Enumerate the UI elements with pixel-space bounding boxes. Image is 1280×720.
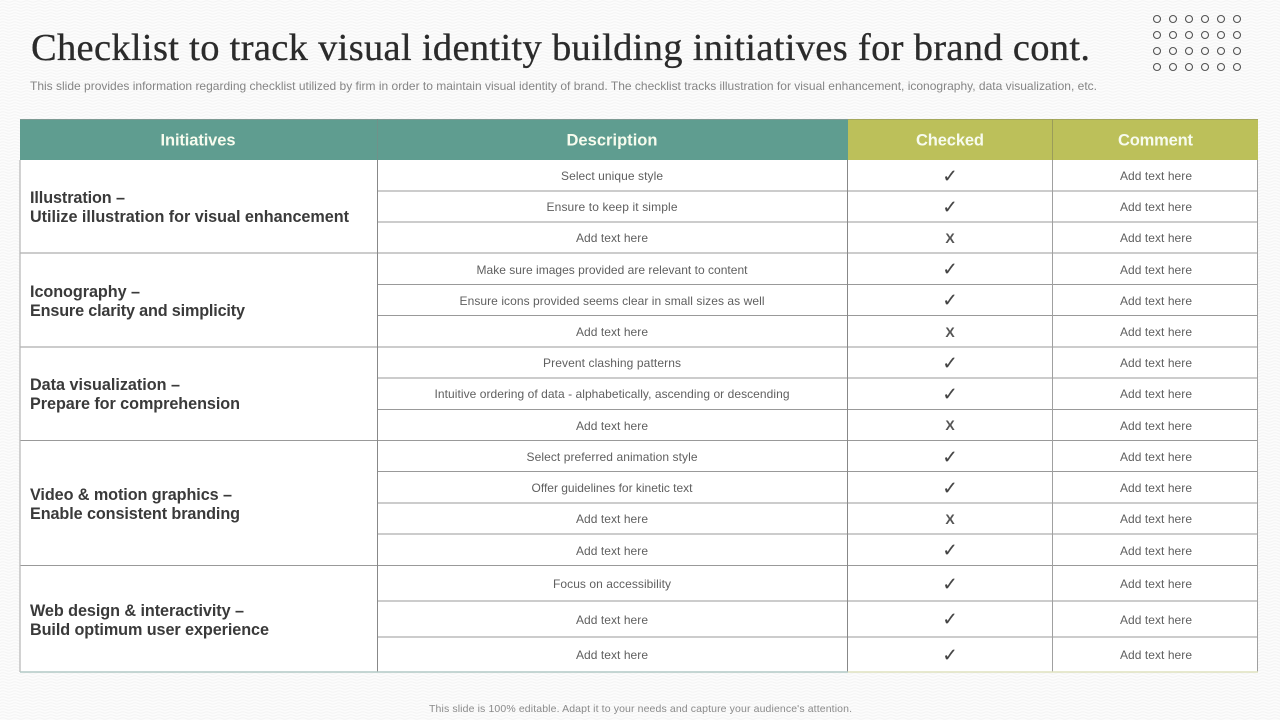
comment column: Add text here <box>1120 544 1192 558</box>
comment column: Add text here <box>1120 231 1192 245</box>
comment column: Add text here <box>1120 450 1192 464</box>
comment column <box>1120 169 1192 662</box>
comment column: Add text here <box>1120 294 1192 308</box>
checked column: ✓ <box>942 478 958 499</box>
checked column <box>942 166 958 666</box>
checked column: ✓ <box>942 290 958 311</box>
description column: Offer guidelines for kinetic text <box>532 481 693 495</box>
checked column: ✓ <box>942 574 958 595</box>
subtitle description: This slide provides information regarding checklist utilized by firm in order to maintain visual identity of brand. The checklist tracks illustration for visual enhancement, iconography, data visualization, etc. <box>30 79 1097 93</box>
checked column: ✓ <box>942 609 958 630</box>
comment column: Add text here <box>1120 512 1192 526</box>
description column: Add text here <box>576 419 648 433</box>
description column: Ensure icons provided seems clear in small sizes as well <box>460 294 764 308</box>
initiative: video and motion graphics: Video & motion graphics – <box>30 486 232 504</box>
comment column: Add text here <box>1120 613 1192 627</box>
initiative: data visualization: Data visualization – <box>30 376 180 394</box>
initiative: illustration: Illustration – <box>30 189 125 207</box>
comment column: Add text here <box>1120 481 1192 495</box>
initiative: video and motion graphics <box>30 486 240 523</box>
footer note: This slide is 100% editable. Adapt it to your needs and capture your audience's attention. <box>429 703 852 715</box>
description column: Add text here <box>576 648 648 662</box>
icon: decorative dot grid <box>1154 16 1240 70</box>
checked column: ✓ <box>942 384 958 405</box>
table header row: Checked <box>916 132 984 150</box>
initiative: illustration: Utilize illustration for visual enhancement <box>30 208 350 226</box>
initiative: web design and interactivity: Build optimum user experience <box>30 621 269 639</box>
description column: Add text here <box>576 325 648 339</box>
comment column: Add text here <box>1120 169 1192 183</box>
description column <box>434 169 790 662</box>
initiative: data visualization: Prepare for comprehension <box>30 395 240 413</box>
comment column: Add text here <box>1120 356 1192 370</box>
table header row: Initiatives <box>160 132 236 150</box>
checked column: X <box>945 230 955 246</box>
description column: Ensure to keep it simple <box>546 200 678 214</box>
description column: Select unique style <box>561 169 663 183</box>
initiative: illustration <box>30 189 350 226</box>
initiative: iconography <box>30 283 245 320</box>
comment column: Add text here <box>1120 325 1192 339</box>
checked column: ✓ <box>942 197 958 218</box>
description column: Make sure images provided are relevant to content <box>476 263 748 277</box>
checked column: ✓ <box>942 166 958 187</box>
table header row <box>20 119 1258 160</box>
comment column: Add text here <box>1120 200 1192 214</box>
initiative: iconography: Ensure clarity and simplicity <box>30 302 245 320</box>
initiative: web design and interactivity: Web design & interactivity – <box>30 602 244 620</box>
description column: Add text here <box>576 231 648 245</box>
comment column: Add text here <box>1120 577 1192 591</box>
description column: Prevent clashing patterns <box>543 356 681 370</box>
initiative: data visualization <box>30 376 240 413</box>
checked column: ✓ <box>942 447 958 468</box>
description column: Focus on accessibility <box>553 577 671 591</box>
description column: Add text here <box>576 613 648 627</box>
comment column: Add text here <box>1120 419 1192 433</box>
checked column: X <box>945 324 955 340</box>
checked column: X <box>945 511 955 527</box>
comment column: Add text here <box>1120 263 1192 277</box>
title: Checklist to track visual identity building initiatives for brand cont. <box>31 27 1090 69</box>
initiative: video and motion graphics: Enable consistent branding <box>30 505 240 523</box>
checked column: ✓ <box>942 645 958 666</box>
description column: Select preferred animation style <box>526 450 698 464</box>
checked column: ✓ <box>942 259 958 280</box>
table header row: Comment <box>1118 132 1194 150</box>
description column: Intuitive ordering of data - alphabetically, ascending or descending <box>434 387 790 401</box>
description column: Add text here <box>576 544 648 558</box>
table header row: Description <box>566 132 658 150</box>
checked column: ✓ <box>942 353 958 374</box>
initiative: web design and interactivity <box>30 602 269 639</box>
checked column: ✓ <box>942 540 958 561</box>
description column: Add text here <box>576 512 648 526</box>
comment column: Add text here <box>1120 648 1192 662</box>
initiative: iconography: Iconography – <box>30 283 140 301</box>
checklist table <box>20 119 1258 672</box>
comment column: Add text here <box>1120 387 1192 401</box>
checked column: X <box>945 417 955 433</box>
